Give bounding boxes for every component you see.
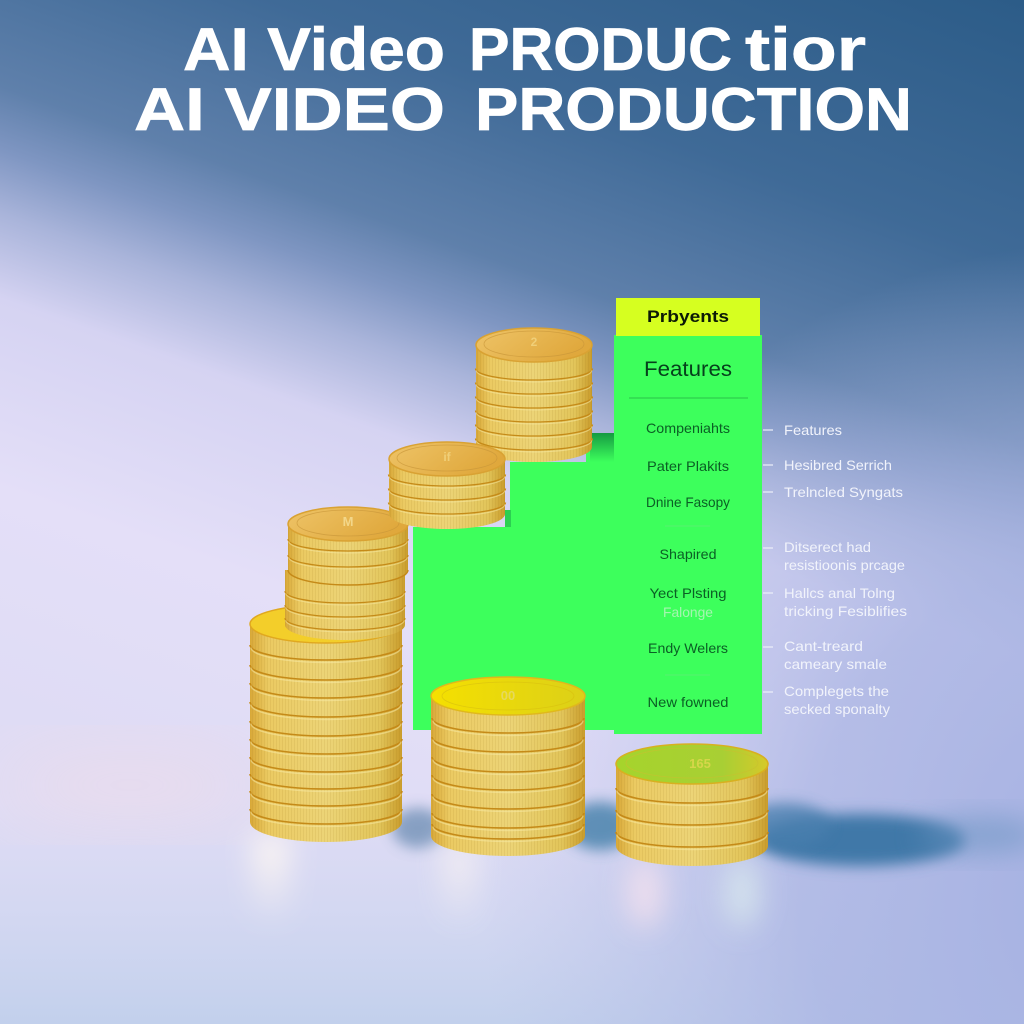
panel: features list: Yect Plsting	[650, 585, 726, 601]
coin stack: front right	[616, 744, 768, 866]
features heading: Features	[644, 358, 732, 381]
yellow header tab	[616, 298, 760, 336]
callout labels: Cant-treard	[784, 638, 863, 654]
panel: features list: Dnine Fasopy	[646, 494, 730, 510]
coin mark: if	[443, 450, 452, 464]
coin stack: upper left	[285, 507, 408, 640]
title: tior	[745, 16, 866, 83]
title: AI VIDEO	[134, 76, 445, 143]
panel: features list: Shapired	[660, 546, 716, 562]
coin mark: M	[343, 514, 353, 529]
panel: features list: Compeniahts	[646, 420, 730, 436]
title: AI Video	[183, 16, 445, 83]
panel: features list	[629, 358, 748, 710]
callout labels: tricking Fesiblifies	[784, 603, 907, 619]
green stepped block	[413, 335, 762, 734]
callout labels: resistioonis prcage	[784, 557, 905, 573]
coin mark: 2	[531, 335, 538, 349]
callout labels: Ditserect had	[784, 539, 871, 555]
coin stack: middle	[388, 442, 506, 529]
callout labels: Hesibred Serrich	[784, 457, 892, 473]
callout labels: Complegets the	[784, 683, 889, 699]
callout labels: Features	[784, 422, 842, 438]
callout labels: secked sponalty	[784, 701, 890, 717]
title: PRODUC	[469, 16, 732, 83]
panel: features list: Pater Plakits	[647, 458, 729, 474]
coin stack: top	[475, 328, 593, 462]
title	[134, 16, 912, 143]
callout labels: Hallcs anal Tolng	[784, 585, 895, 601]
callout labels	[763, 422, 907, 717]
panel: features list: Falonge	[663, 604, 713, 620]
coin stack: tall left	[250, 605, 402, 842]
callout labels: cameary smale	[784, 656, 887, 672]
coin stack: front centre	[431, 677, 585, 856]
panel: features list: New fowned	[648, 694, 728, 710]
coin mark: 165	[689, 756, 711, 771]
yellow header tab: Prbyents	[647, 307, 729, 326]
panel: features list: Endy Welers	[648, 640, 728, 656]
title: PRODUCTION	[475, 76, 912, 143]
floor shadows and reflections	[252, 802, 1024, 930]
callout labels: Trelncled Syngats	[784, 484, 903, 500]
coin mark: 00	[501, 688, 515, 703]
